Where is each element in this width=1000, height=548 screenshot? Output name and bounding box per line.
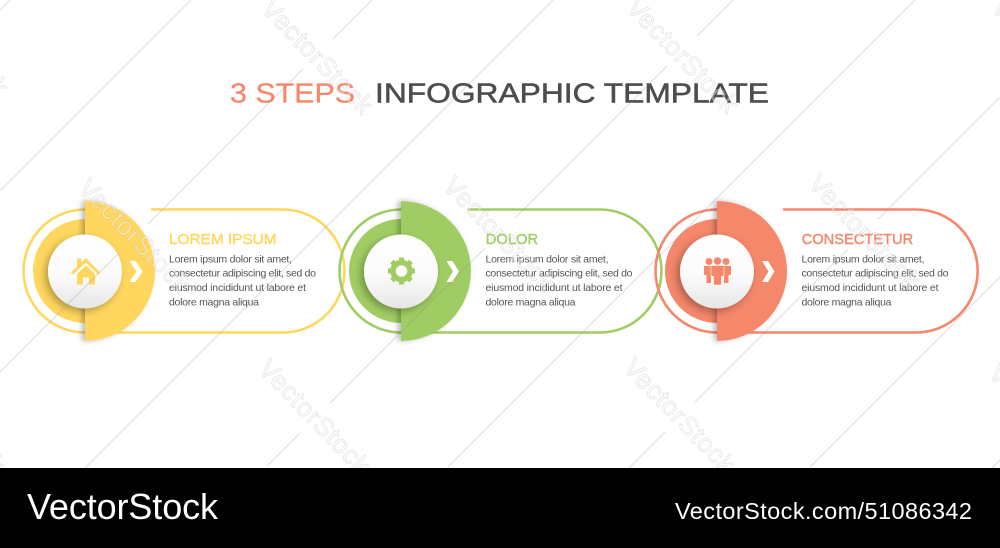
step 1 outline pill [24,210,344,332]
step 3 heading: CONSECTETUR [802,231,913,248]
icon: house [71,258,100,284]
step 2 arrow [446,261,459,282]
icon: people [704,257,731,285]
step 3: consectetur [656,201,978,341]
icon: gear [388,258,415,284]
step 3 arrow [762,261,774,282]
step 2 body text: eiusmod incididunt ut labore et [486,282,623,294]
step 1 body text: consectetur adipiscing elit, sed do [169,268,316,280]
step 2 outline pill [340,210,661,332]
title [230,78,769,108]
step 2 body text [486,253,633,309]
watermark text: VectorStock [438,170,562,298]
footer bar [0,468,1000,548]
step 3 outline pill [656,210,978,332]
step 1: lorem ipsum [24,201,344,341]
watermark text: VectorStock [73,172,197,300]
step 1 body text: Lorem ipsum dolor sit amet, [169,253,292,265]
watermark text: VectorStock [618,352,742,480]
step 1 body text: dolore magna aliqua [169,297,259,309]
step 3 half disc [717,201,787,341]
title: 3 STEPS [230,78,355,108]
step 3 body text [802,253,949,309]
step 2 heading: DOLOR [486,231,538,248]
step 2 body text: consectetur adipiscing elit, sed do [486,268,633,280]
step 2 half disc [401,201,471,341]
footer brand: VectorStock [27,486,219,527]
step 1 body text [169,253,316,309]
step 3 inner semicircle [665,219,717,323]
step 2 body text: Lorem ipsum dolor sit amet, [486,253,608,265]
watermark text: VectorStock [253,353,377,481]
step 1 half disc [85,201,155,341]
watermark text: VectorStock [803,168,927,296]
footer image id: VectorStock.com/51086342 [675,498,972,524]
step 3 body text: eiusmod incididunt ut labore et [802,282,939,294]
step 3 white circle [680,234,754,308]
title: INFOGRAPHIC TEMPLATE [375,78,769,108]
step 3 body text: consectetur adipiscing elit, sed do [802,268,949,280]
step 1 arrow [130,261,142,282]
step 3 body text: dolore magna aliqua [802,297,892,309]
step 2 body text: dolore magna aliqua [486,297,576,309]
step 1 white circle [48,234,122,308]
step 1 heading: LOREM IPSUM [169,231,276,248]
step 1 inner semicircle [33,219,85,323]
step 1 body text: eiusmod incididunt ut labore et [169,282,306,294]
step 2: dolor [340,201,661,341]
step 3 body text: Lorem ipsum dolor sit amet, [802,253,924,265]
step 2 inner semicircle [349,219,401,323]
step 2 white circle [364,234,438,308]
